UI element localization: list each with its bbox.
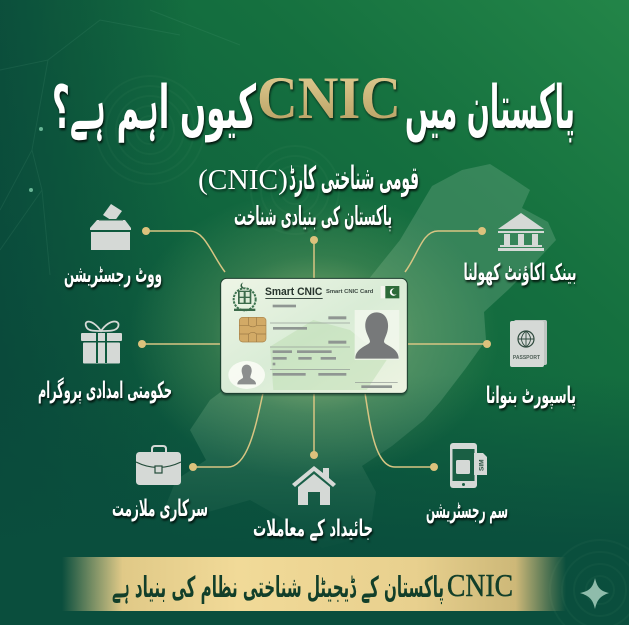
map of Pakistan silhouette: [160, 164, 556, 548]
icon: ballot box: [90, 204, 131, 250]
card: data bars: [270, 305, 398, 388]
smart CNIC card: [221, 278, 407, 396]
icon: gift box: [81, 321, 122, 364]
card: heading: Smart CNIC: [265, 286, 322, 298]
subtitle: national identity card: [198, 159, 419, 197]
title: CNIC: [257, 65, 401, 131]
bottom banner: CNIC: [447, 567, 513, 603]
icon: briefcase: [136, 446, 181, 485]
label: property matters: جائیداد کے معاملات: [253, 516, 373, 542]
connector dots: [138, 227, 491, 471]
label: government employment: سرکاری ملازمت: [112, 496, 208, 522]
label: vote registration: ووٹ رجسٹریشن: [64, 262, 162, 288]
card: map tint: [270, 320, 387, 390]
icon: passport: PASSPORT: [513, 355, 540, 361]
network lines decoration: [0, 10, 240, 275]
card: small photo: [228, 361, 265, 389]
title: [52, 65, 575, 143]
connector lines: [142, 231, 487, 467]
smart CNIC card: Smart CNIC Card: [326, 289, 373, 295]
icon: sparkle: [580, 578, 609, 609]
fingerprint watermarks: [96, 76, 629, 625]
card: photo: [355, 310, 399, 360]
text: پاکستان کی بنیادی شناخت: [234, 202, 392, 232]
bottom banner: [62, 557, 566, 611]
icon: SIM phone: [450, 443, 487, 488]
icon: house: [292, 466, 336, 505]
text: حکومتی امدادی پروگرام: [38, 377, 172, 404]
icon: SIM phone: SIM: [478, 459, 486, 471]
card: chip: [239, 317, 266, 342]
card: flag: [381, 286, 399, 298]
title: کیوں اہم ہے؟: [52, 73, 256, 143]
icon: passport: [510, 320, 547, 367]
text: قومی شناختی کارڈ: [289, 159, 419, 197]
icon: bank: [498, 213, 544, 251]
card: emblem: [234, 283, 256, 311]
glow behind card: [129, 190, 499, 480]
subtitle: national identity card: (CNIC): [198, 164, 288, 196]
text: سم رجسٹریشن: [426, 498, 508, 524]
